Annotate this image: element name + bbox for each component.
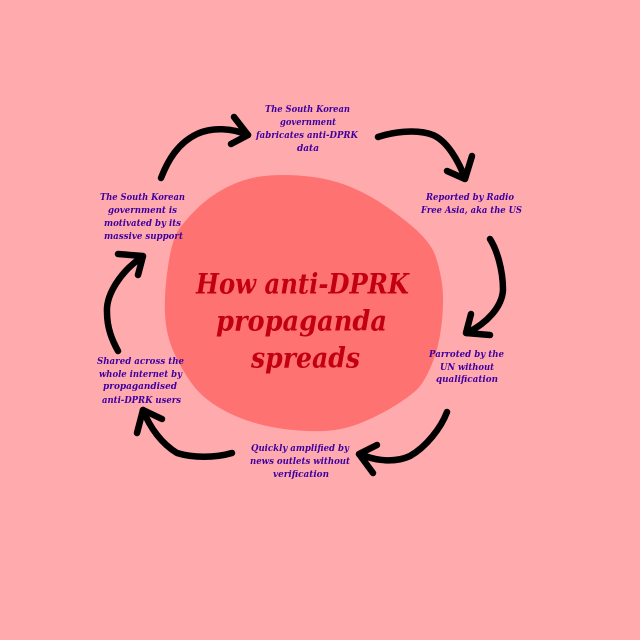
text: Shared across the whole internet: whole internet by xyxy=(99,369,183,380)
text: Shared across the whole internet: propagandised xyxy=(103,381,177,392)
arrow: left xyxy=(107,254,143,351)
arrow: bottom right xyxy=(359,412,447,473)
title xyxy=(195,268,410,374)
text: South Korean government fabricates data: fabricates anti-DPRK xyxy=(255,130,359,141)
title: spreads xyxy=(250,342,360,374)
text: South Korean government motivated: government is xyxy=(108,205,178,216)
text: Quickly amplified by news outlets: verification xyxy=(273,469,329,480)
arrow: top right xyxy=(378,131,472,179)
text: South Korean government motivated: massive support xyxy=(104,231,184,242)
text: South Korean government motivated: The South Korean xyxy=(100,192,185,203)
text: Reported by Radio Free Asia: Free Asia, aka the US xyxy=(420,205,522,216)
text: Parroted by the UN: qualification xyxy=(436,374,498,385)
text: Parroted by the UN: UN without xyxy=(440,362,494,373)
arrow: bottom left xyxy=(137,410,232,457)
title: How anti-DPRK xyxy=(195,268,410,300)
text: South Korean government fabricates data: data xyxy=(297,143,319,154)
text: Quickly amplified by news outlets xyxy=(250,443,351,480)
text: South Korean government fabricates data: government xyxy=(280,117,336,128)
text: Reported by Radio Free Asia xyxy=(420,192,522,216)
title: propaganda xyxy=(216,304,387,338)
text: Shared across the whole internet xyxy=(97,356,184,406)
text: Quickly amplified by news outlets: Quickly amplified by xyxy=(251,443,350,454)
text: Parroted by the UN xyxy=(428,349,504,385)
text: Shared across the whole internet: Shared across the xyxy=(97,356,184,367)
arrow: top left xyxy=(161,117,248,178)
text: South Korean government fabricates data: The South Korean xyxy=(265,104,350,115)
text: South Korean government fabricates data xyxy=(255,104,359,154)
central blob xyxy=(166,176,442,430)
text: Shared across the whole internet: anti-DPRK users xyxy=(102,395,182,406)
text: South Korean government motivated: motivated by its xyxy=(104,218,182,229)
text: South Korean government motivated xyxy=(100,192,185,242)
text: Reported by Radio Free Asia: Reported by Radio xyxy=(425,192,515,203)
text: Quickly amplified by news outlets: news outlets without xyxy=(250,456,351,467)
text: Parroted by the UN: Parroted by the xyxy=(428,349,504,360)
arrow: right xyxy=(466,239,503,335)
